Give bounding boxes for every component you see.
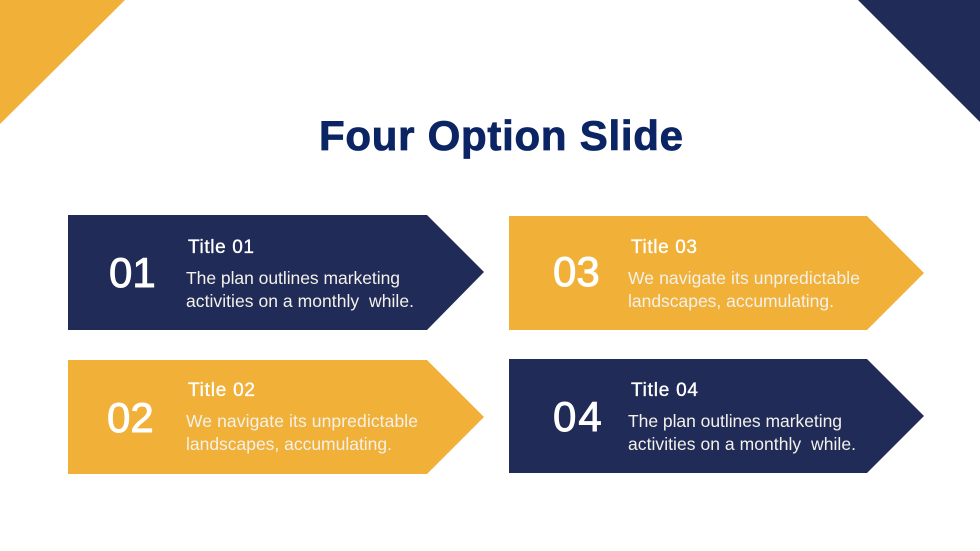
- arrow shape 01: [68, 215, 484, 330]
- body text 02: We navigate its unpredictable: [186, 411, 418, 431]
- number 04: 04: [553, 393, 604, 440]
- title: Four Option Slide: [319, 112, 683, 159]
- panel: option 04: [509, 359, 924, 473]
- body text 04: The plan outlines marketing: [628, 411, 842, 431]
- panel: option 02: [68, 360, 484, 474]
- arrow shape 03: [509, 216, 924, 330]
- body text 04: activities on a monthly while.: [628, 434, 856, 454]
- body text 02: landscapes, accumulating.: [186, 434, 392, 454]
- body text 03: We navigate its unpredictable: [628, 268, 860, 288]
- number 01: 01: [109, 249, 156, 296]
- arrow shape 02: [68, 360, 484, 474]
- number 03: 03: [553, 248, 600, 295]
- number 02: 02: [107, 394, 154, 441]
- body text 01: activities on a monthly while.: [186, 291, 414, 311]
- corner triangle: yellow top-left: [0, 0, 125, 124]
- heading 02: Title 02: [188, 380, 255, 401]
- body text 01: The plan outlines marketing: [186, 268, 400, 288]
- body text 03: landscapes, accumulating.: [628, 291, 834, 311]
- corner triangle: navy top-right: [858, 0, 980, 122]
- panel: option 03: [509, 216, 924, 330]
- arrow shape 04: [509, 359, 924, 473]
- heading 03: Title 03: [631, 237, 697, 258]
- panel: option 01: [68, 215, 484, 330]
- heading 01: Title 01: [188, 237, 254, 258]
- heading 04: Title 04: [631, 380, 698, 401]
